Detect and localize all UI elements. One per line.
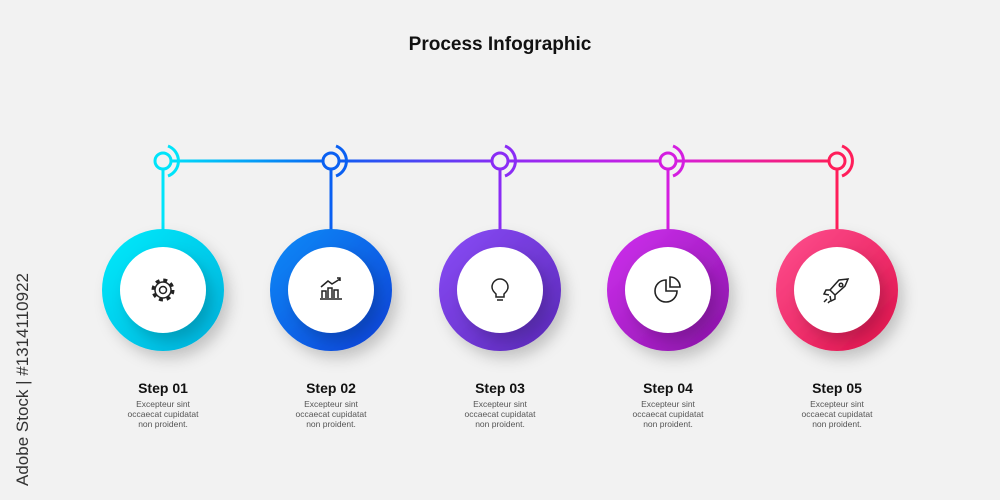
step 5: [776, 146, 898, 429]
step 4: non proident.: [643, 419, 693, 429]
step 1: Step 01: [138, 380, 188, 396]
step 4: [607, 146, 729, 429]
icon: chart: [320, 278, 342, 299]
step 2: Excepteur sint: [304, 399, 359, 409]
icon: bulb: [492, 279, 508, 300]
step 2: [270, 146, 392, 429]
connector line: [171, 160, 829, 162]
watermark: Adobe Stock | #1314110922: [13, 273, 32, 486]
step 3: [439, 146, 561, 429]
step 4: Step 04: [643, 380, 693, 396]
title: Process Infographic: [409, 34, 592, 55]
step 2: non proident.: [306, 419, 356, 429]
step 4: occaecat cupidatat: [633, 409, 704, 419]
icon: rocket: [824, 279, 848, 303]
step 1: occaecat cupidatat: [128, 409, 199, 419]
step 5: occaecat cupidatat: [802, 409, 873, 419]
step 3: Excepteur sint: [473, 399, 528, 409]
step 4: Excepteur sint: [641, 399, 696, 409]
step 3: occaecat cupidatat: [465, 409, 536, 419]
icon: gear: [153, 280, 173, 300]
step 1: Excepteur sint: [136, 399, 191, 409]
step 1: [102, 146, 224, 429]
step 3: Step 03: [475, 380, 525, 396]
step 3: non proident.: [475, 419, 525, 429]
step 1: non proident.: [138, 419, 188, 429]
step 5: non proident.: [812, 419, 862, 429]
step 5: Step 05: [812, 380, 862, 396]
step 2: Step 02: [306, 380, 356, 396]
icon: pie chart: [655, 277, 680, 302]
step 5: Excepteur sint: [810, 399, 865, 409]
step 2: occaecat cupidatat: [296, 409, 367, 419]
